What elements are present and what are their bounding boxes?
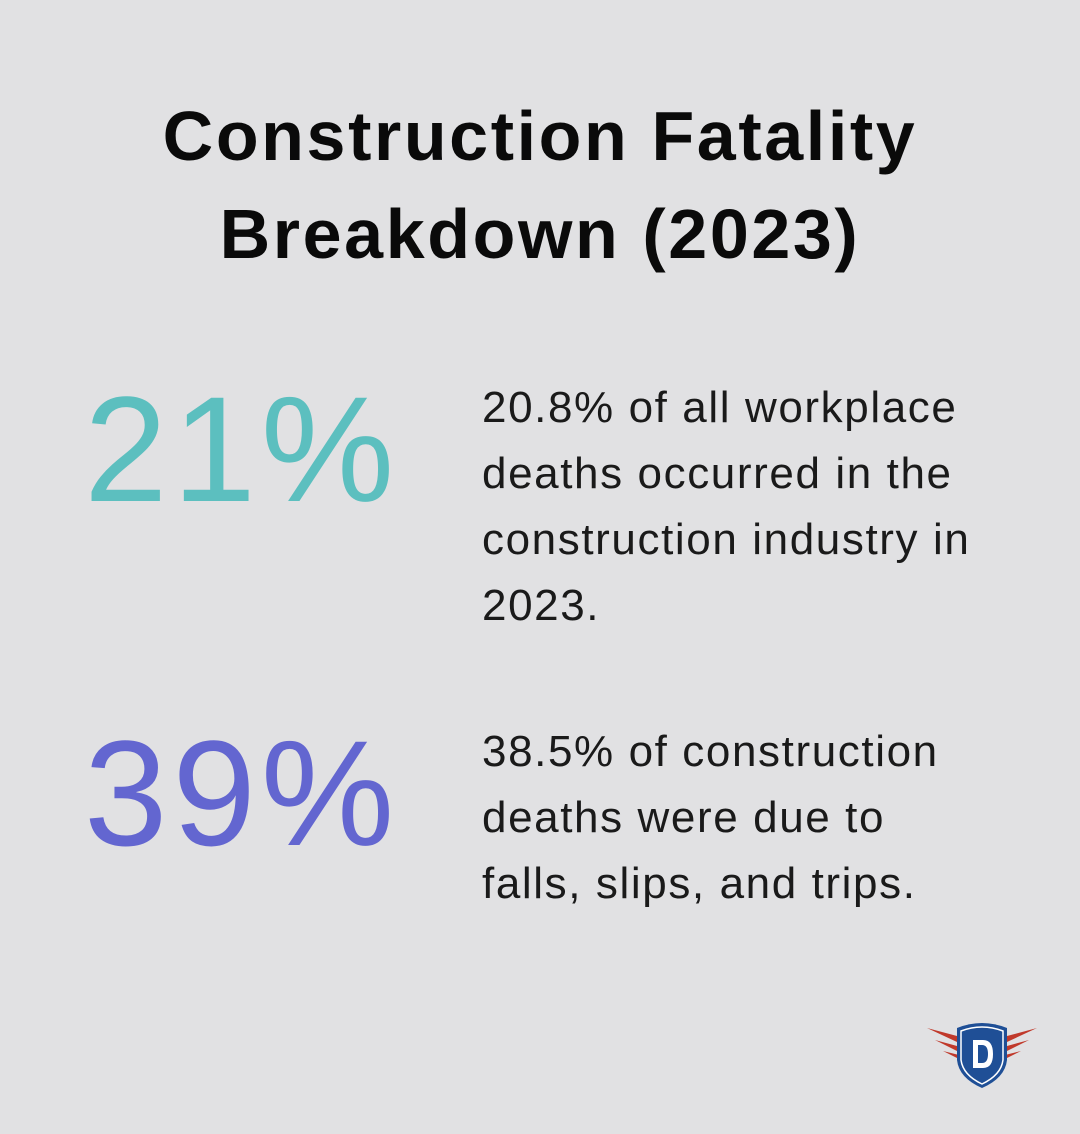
stat 1 text: construction industry in <box>482 515 970 564</box>
stat 2 text: 38.5% of construction <box>482 727 939 776</box>
stat 2 text <box>482 727 939 908</box>
stat 1 text <box>482 383 970 630</box>
stat 1 text: 2023. <box>482 581 600 630</box>
stat 2 text: deaths were due to <box>482 793 885 842</box>
stat 1 text: deaths occurred in the <box>482 449 953 498</box>
stat 2 number: 39% <box>84 709 399 877</box>
icon: logo <box>927 1023 1037 1088</box>
title: Breakdown (2023) <box>220 195 860 273</box>
stat 2 text: falls, slips, and trips. <box>482 859 917 908</box>
title: Construction Fatality <box>163 97 917 175</box>
title <box>163 97 917 273</box>
stat 1 number: 21% <box>84 365 399 533</box>
stat 1 text: 20.8% of all workplace <box>482 383 957 432</box>
